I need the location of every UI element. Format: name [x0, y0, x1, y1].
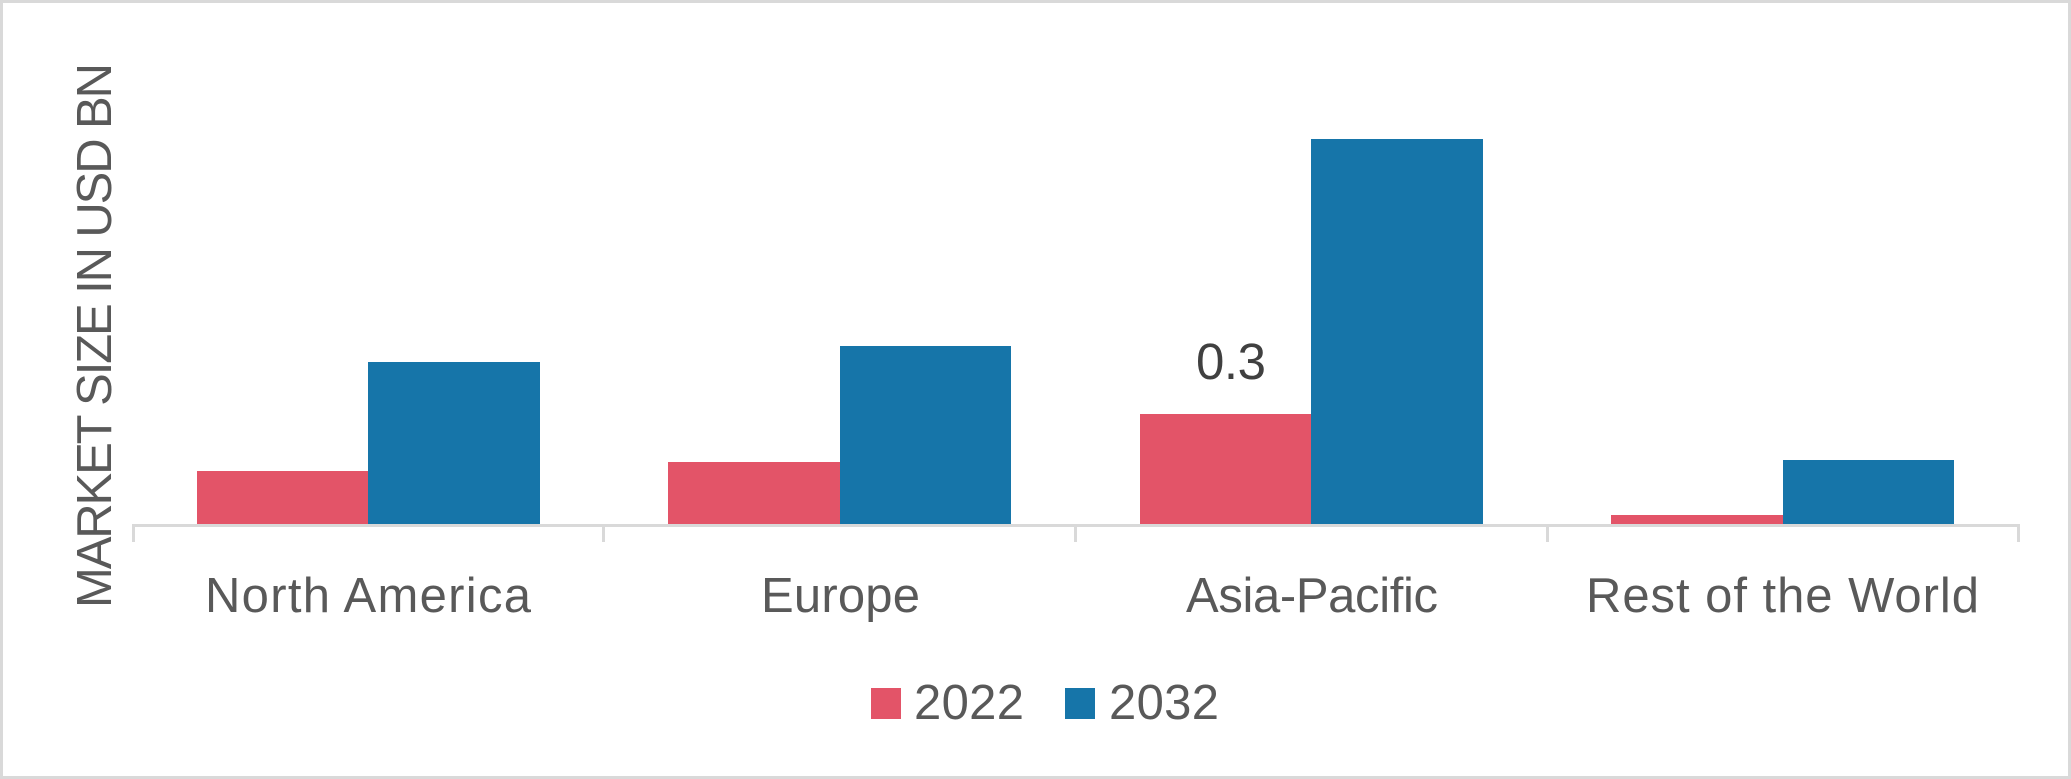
- legend: 2022: [914, 676, 1024, 730]
- data label: Asia-Pacific 2022: 0.3: [1196, 333, 1266, 390]
- bars: Rest of the World: [1611, 460, 1954, 524]
- x axis with tick marks: [132, 524, 2020, 542]
- legend: [871, 676, 1219, 730]
- bars: North America: [197, 362, 540, 524]
- bars: Europe: [668, 346, 1011, 524]
- y axis title: MARKET SIZE IN USD BN: [68, 63, 122, 608]
- category labels: Rest of the World: [1586, 569, 1979, 623]
- category labels: North America: [205, 569, 532, 623]
- category labels: Asia-Pacific: [1186, 569, 1438, 623]
- category labels: Europe: [761, 569, 920, 623]
- category labels: [205, 569, 1979, 623]
- bars: Asia-Pacific: [1140, 139, 1483, 524]
- legend: 2032: [1109, 676, 1219, 730]
